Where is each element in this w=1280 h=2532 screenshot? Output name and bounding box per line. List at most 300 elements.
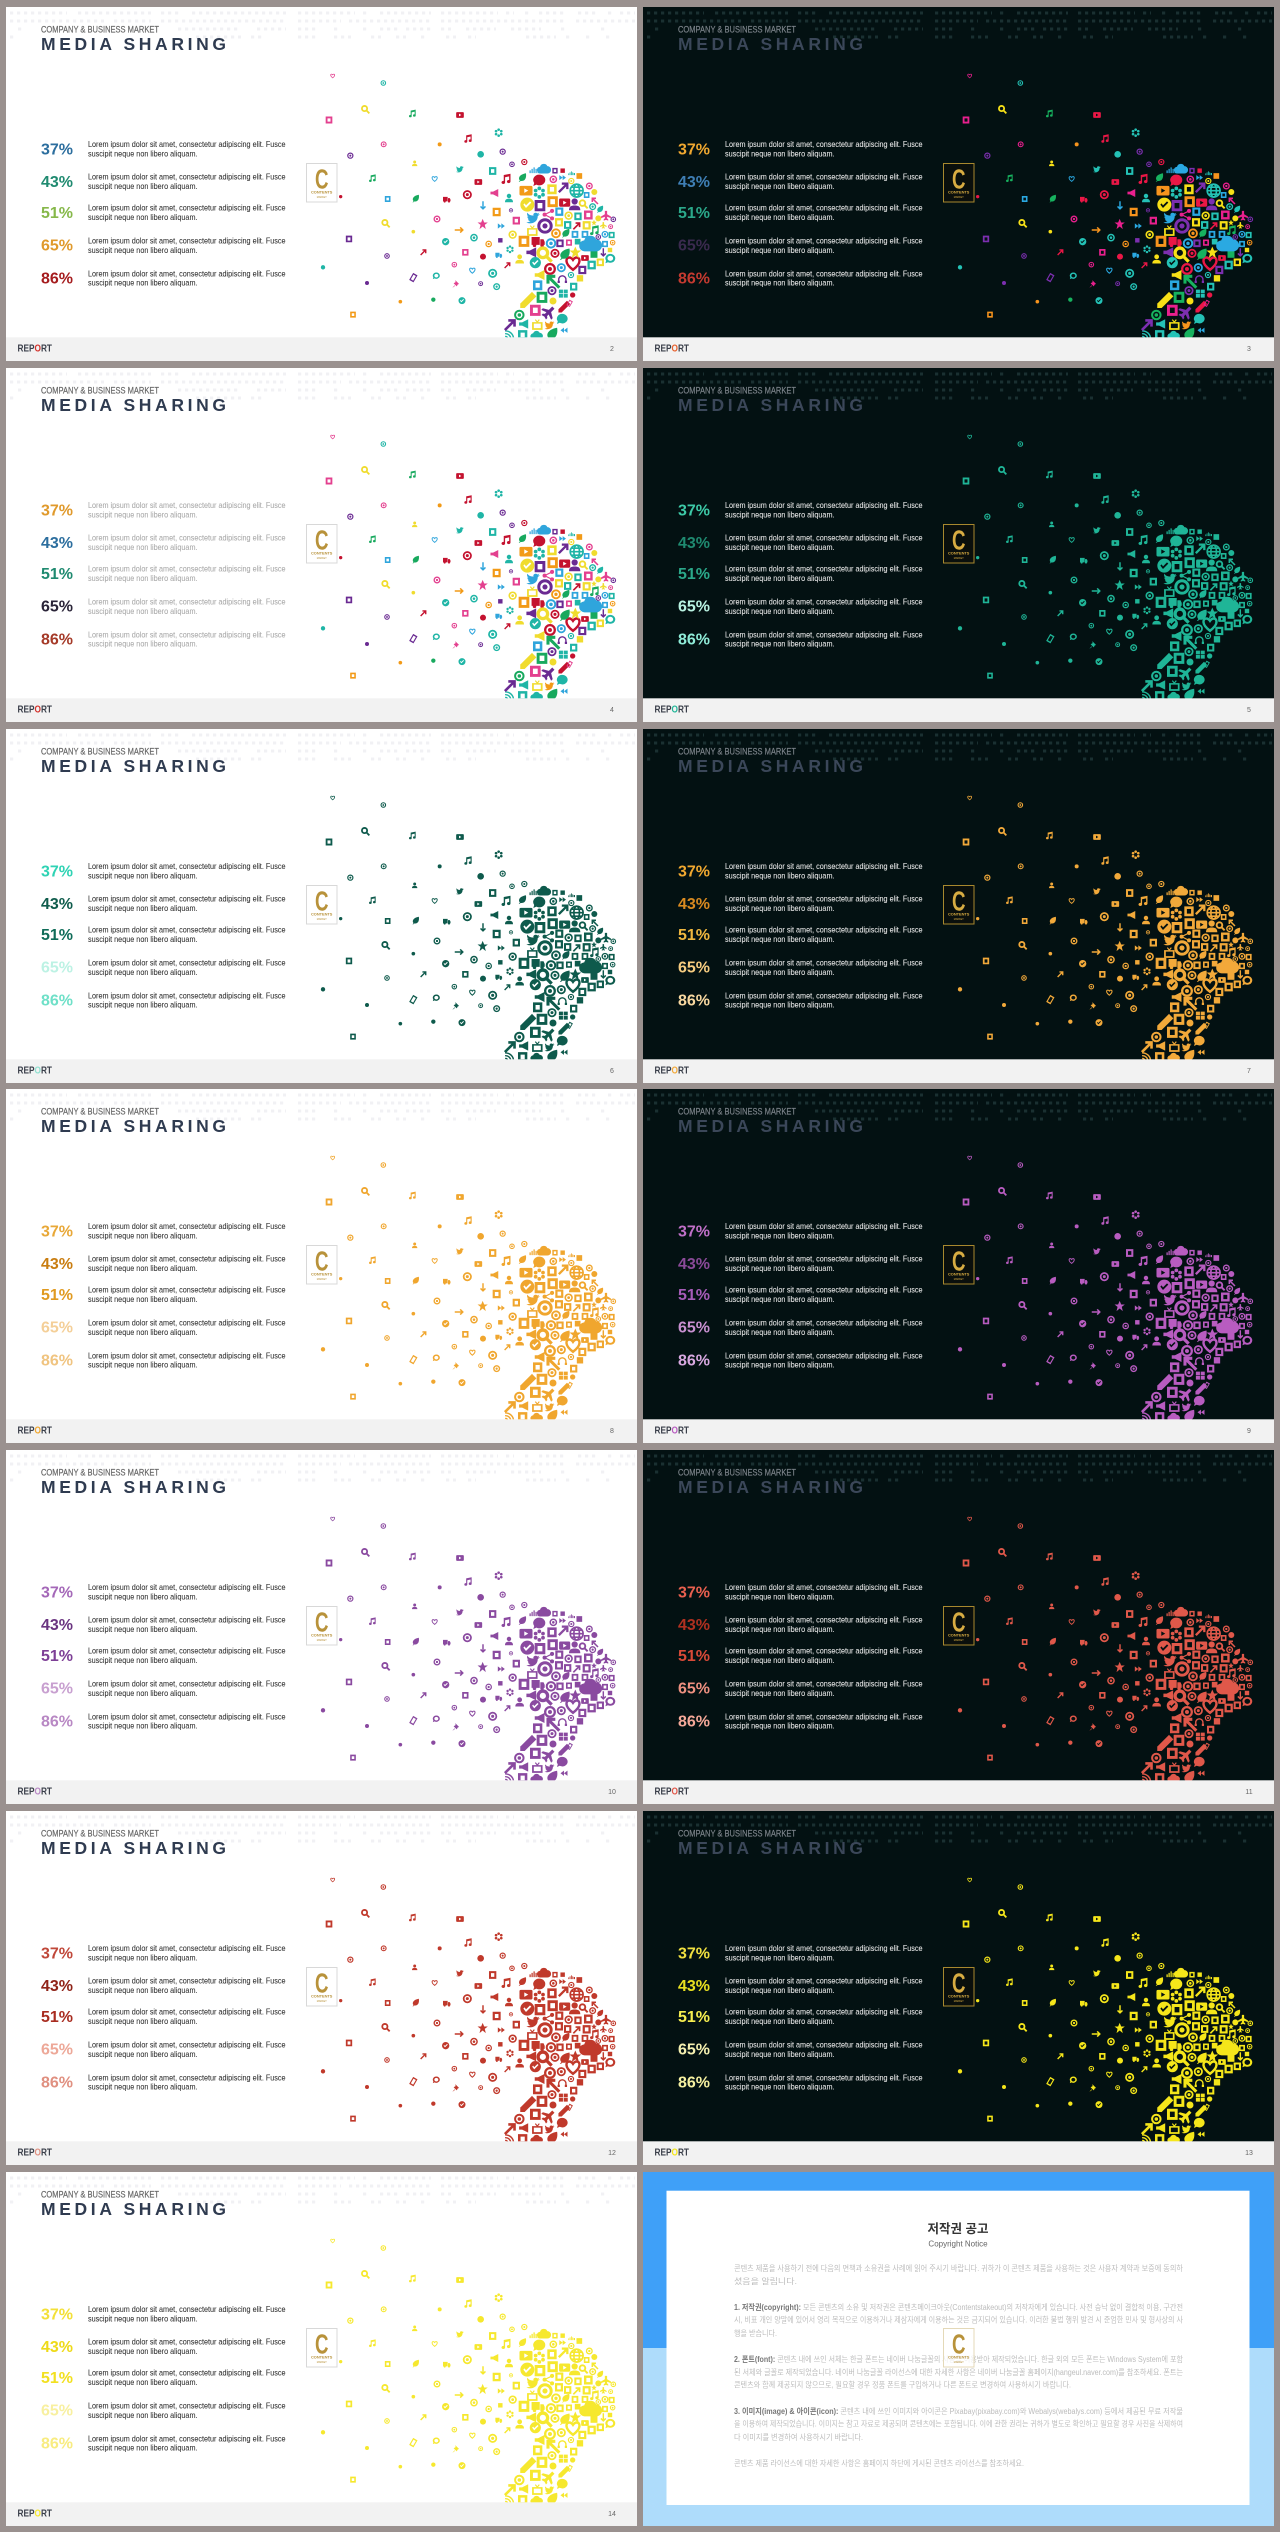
- footer: REPORT: [654, 1785, 689, 1797]
- stat 65%: suscipit neque non libero aliquam.: [88, 968, 198, 977]
- stat 51%: suscipit neque non libero aliquam.: [725, 2017, 834, 2026]
- stat 65%: [678, 958, 923, 977]
- logo badge: [306, 164, 337, 202]
- stat 37%: suscipit neque non libero aliquam.: [725, 871, 834, 880]
- stat 65%: Lorem ipsum dolor sit amet, consectetur adipiscing elit. Fusce: [725, 958, 923, 967]
- panel: slide 3: [643, 7, 1274, 361]
- stat 43%: Lorem ipsum dolor sit amet, consectetur adipiscing elit. Fusce: [725, 533, 923, 542]
- logo badge: CONTENTS: [948, 1994, 970, 1998]
- panel: slide 9: [643, 1089, 1274, 1443]
- heading: COMPANY & BUSINESS MARKET: [41, 1107, 159, 1118]
- stat 86%: [678, 1352, 923, 1370]
- logo badge: [944, 1246, 974, 1284]
- stat 86%: Lorem ipsum dolor sit amet, consectetur adipiscing elit. Fusce: [88, 1352, 286, 1361]
- stat 43%: 43%: [678, 1978, 710, 1995]
- stat 43%: Lorem ipsum dolor sit amet, consectetur adipiscing elit. Fusce: [88, 1616, 286, 1625]
- stat 86%: Lorem ipsum dolor sit amet, consectetur adipiscing elit. Fusce: [88, 630, 286, 639]
- footer: [6, 1059, 637, 1083]
- footer: [643, 1780, 1274, 1804]
- stat 51%: [678, 564, 923, 583]
- stat 43%: [678, 894, 923, 913]
- stat 86%: suscipit neque non libero aliquam.: [725, 2083, 834, 2092]
- stat 65%: suscipit neque non libero aliquam.: [88, 2411, 198, 2420]
- logo badge: C: [952, 1246, 965, 1277]
- stat 65%: Lorem ipsum dolor sit amet, consectetur adipiscing elit. Fusce: [88, 1319, 286, 1328]
- stat 43%: [41, 1977, 286, 1995]
- stat 37%: suscipit neque non libero aliquam.: [88, 1592, 198, 1601]
- stat 43%: 43%: [41, 174, 73, 191]
- heading: MEDIA SHARING: [41, 2199, 226, 2219]
- stat 43%: 43%: [41, 1256, 73, 1273]
- logo badge: [944, 885, 974, 924]
- notice: font: 된 서체와 글꼴로 제작되었습니다. 네이버 나눔글꼴 라이선스에 대한 자세한 사항은 네이버 나눔글꼴 홈페이지(hangeul.naver.com)를 참조하세요. 폰트는: [734, 2367, 1183, 2377]
- stat 37%: 37%: [678, 1946, 710, 1962]
- stat 37%: [41, 862, 286, 880]
- stat 43%: [678, 1616, 923, 1634]
- stat 43%: 43%: [678, 1256, 710, 1273]
- stat 37%: suscipit neque non libero aliquam.: [725, 1232, 834, 1241]
- footer: 7: [1247, 1068, 1251, 1075]
- stat 37%: 37%: [678, 1585, 710, 1602]
- stat 43%: suscipit neque non libero aliquam.: [88, 1625, 198, 1634]
- stat 51%: [41, 1286, 286, 1304]
- stat 65%: 65%: [678, 2042, 710, 2059]
- stat 37%: suscipit neque non libero aliquam.: [88, 1232, 198, 1241]
- stat 43%: suscipit neque non libero aliquam.: [725, 182, 834, 191]
- panel: slide 10: [6, 1450, 637, 1804]
- stat 43%: suscipit neque non libero aliquam.: [88, 1264, 198, 1273]
- logo badge: CONTENTS: [311, 1272, 333, 1277]
- logo badge: [306, 1607, 337, 1645]
- stat 65%: Lorem ipsum dolor sit amet, consectetur adipiscing elit. Fusce: [725, 2041, 923, 2050]
- stat 51%: Lorem ipsum dolor sit amet, consectetur adipiscing elit. Fusce: [725, 1647, 923, 1656]
- logo badge: CONTENTS: [948, 2354, 970, 2359]
- footer: [6, 2141, 637, 2165]
- stat 51%: 51%: [678, 2009, 710, 2026]
- stat 37%: [41, 1583, 286, 1602]
- logo badge: [944, 1968, 974, 2006]
- footer: [643, 2141, 1274, 2165]
- stat 37%: suscipit neque non libero aliquam.: [725, 510, 834, 519]
- stat 86%: 86%: [678, 270, 710, 287]
- logo badge: [944, 524, 974, 563]
- stat 51%: suscipit neque non libero aliquam.: [725, 574, 834, 583]
- stat 65%: [678, 1680, 923, 1698]
- stat 51%: Lorem ipsum dolor sit amet, consectetur adipiscing elit. Fusce: [88, 564, 286, 573]
- stat 65%: 65%: [41, 2402, 73, 2419]
- footer: 10: [608, 1789, 616, 1796]
- stat 65%: suscipit neque non libero aliquam.: [725, 246, 834, 255]
- logo badge: C: [952, 885, 965, 916]
- footer: REPORT: [18, 703, 52, 715]
- stat 86%: 86%: [41, 1353, 73, 1370]
- stat 86%: suscipit neque non libero aliquam.: [88, 2083, 198, 2092]
- stat 43%: suscipit neque non libero aliquam.: [725, 1986, 834, 1995]
- stat 37%: 37%: [678, 863, 710, 880]
- logo badge: MARKET: [317, 2000, 327, 2003]
- stat 65%: suscipit neque non libero aliquam.: [88, 2050, 198, 2059]
- panel: slide 4: [6, 368, 637, 722]
- stat 43%: suscipit neque non libero aliquam.: [725, 904, 834, 913]
- notice intro: 콘텐츠 제품을 사용하기 전에 다음의 면책과 소유권을 사례에 읽어 주시기 바랍니다. 귀하가 이 콘텐츠 제품을 사용하는 것은 사용자 계약과 보증에 동의하: [734, 2263, 1184, 2273]
- stat 86%: [41, 1352, 286, 1370]
- footer: [6, 1420, 637, 1444]
- logo badge: C: [315, 2328, 328, 2359]
- stat 51%: 51%: [678, 205, 710, 222]
- stat 51%: Lorem ipsum dolor sit amet, consectetur adipiscing elit. Fusce: [725, 1286, 923, 1295]
- logo badge: MARKET: [317, 2361, 327, 2364]
- icon cloud: head: [321, 796, 616, 1062]
- footer: REPORT: [18, 1425, 52, 1437]
- icon cloud: head: [958, 435, 1253, 701]
- stat 43%: Lorem ipsum dolor sit amet, consectetur adipiscing elit. Fusce: [88, 1255, 286, 1264]
- heading: [41, 1107, 226, 1136]
- notice: image and icon: 3. 이미지(image) & 아이콘(icon): 콘텐츠 내에 쓰인 이미지와 아이콘은 Pixabay(pixabay.com)와 Webalys(webalys.com) 등에서 제공된 무료 저작물: [734, 2406, 1183, 2416]
- panel: slide 5: [643, 368, 1274, 722]
- stat 65%: 65%: [41, 959, 73, 976]
- stat 43%: Lorem ipsum dolor sit amet, consectetur adipiscing elit. Fusce: [725, 894, 923, 903]
- stat 51%: 51%: [678, 927, 710, 944]
- stat 43%: 43%: [678, 174, 710, 191]
- logo badge: MARKET: [954, 1639, 964, 1642]
- logo badge: [306, 885, 337, 924]
- heading: [41, 24, 226, 54]
- logo badge: MARKET: [954, 196, 964, 199]
- logo badge: C: [315, 1968, 328, 1998]
- stat 51%: suscipit neque non libero aliquam.: [88, 2017, 198, 2026]
- stat 86%: [41, 630, 286, 648]
- stat 86%: suscipit neque non libero aliquam.: [725, 1722, 834, 1731]
- stat 86%: [678, 991, 923, 1009]
- notice: image and icon: 다 이미지를 변경하여 사용하시기 바랍니다.: [734, 2432, 863, 2442]
- stat 65%: 65%: [41, 598, 73, 615]
- stat 86%: suscipit neque non libero aliquam.: [725, 1361, 834, 1370]
- stat 37%: suscipit neque non libero aliquam.: [88, 2314, 198, 2323]
- stat 65%: Lorem ipsum dolor sit amet, consectetur adipiscing elit. Fusce: [88, 2041, 286, 2050]
- footer: REPORT: [18, 2146, 52, 2158]
- stat 51%: Lorem ipsum dolor sit amet, consectetur adipiscing elit. Fusce: [88, 204, 286, 213]
- stat 37%: [678, 1944, 923, 1962]
- heading: [41, 385, 226, 415]
- stat 51%: suscipit neque non libero aliquam.: [725, 213, 834, 222]
- stat 65%: [678, 237, 923, 255]
- stat 86%: [678, 2073, 923, 2092]
- stat 43%: 43%: [41, 896, 73, 913]
- heading: COMPANY & BUSINESS MARKET: [41, 1467, 159, 1478]
- stat 51%: suscipit neque non libero aliquam.: [88, 1656, 198, 1665]
- stat 37%: Lorem ipsum dolor sit amet, consectetur adipiscing elit. Fusce: [725, 862, 923, 871]
- stat 86%: Lorem ipsum dolor sit amet, consectetur adipiscing elit. Fusce: [88, 2073, 286, 2082]
- stat 43%: Lorem ipsum dolor sit amet, consectetur adipiscing elit. Fusce: [88, 1977, 286, 1986]
- stat 65%: Lorem ipsum dolor sit amet, consectetur adipiscing elit. Fusce: [725, 597, 923, 606]
- heading: COMPANY & BUSINESS MARKET: [41, 24, 159, 35]
- stat 65%: 65%: [41, 1681, 73, 1698]
- panel: slide 8: [6, 1089, 637, 1443]
- stat 51%: [41, 1647, 286, 1665]
- heading: MEDIA SHARING: [678, 1838, 863, 1858]
- footer: 8: [610, 1428, 614, 1435]
- stat 65%: suscipit neque non libero aliquam.: [725, 1328, 834, 1337]
- icon cloud: head: [321, 74, 616, 340]
- icon cloud: head: [958, 1157, 1253, 1422]
- heading: [41, 746, 226, 776]
- footer: [6, 2502, 637, 2526]
- stat 65%: suscipit neque non libero aliquam.: [88, 246, 198, 255]
- stat 51%: Lorem ipsum dolor sit amet, consectetur adipiscing elit. Fusce: [88, 1286, 286, 1295]
- stat 65%: 65%: [678, 238, 710, 255]
- logo badge: C: [952, 1968, 965, 1998]
- stat 65%: 65%: [678, 1681, 710, 1698]
- footer: 4: [610, 707, 614, 714]
- stat 86%: 86%: [678, 1713, 710, 1730]
- stat 51%: Lorem ipsum dolor sit amet, consectetur adipiscing elit. Fusce: [88, 2368, 286, 2377]
- stat 65%: 65%: [41, 1320, 73, 1337]
- footer: [643, 1420, 1274, 1444]
- stat 51%: 51%: [678, 1648, 710, 1665]
- stat 86%: suscipit neque non libero aliquam.: [88, 639, 198, 648]
- stat 43%: Lorem ipsum dolor sit amet, consectetur adipiscing elit. Fusce: [88, 2337, 286, 2346]
- stat 37%: 37%: [41, 863, 73, 880]
- stat 86%: [41, 1712, 286, 1731]
- stat 43%: Lorem ipsum dolor sit amet, consectetur adipiscing elit. Fusce: [725, 1616, 923, 1625]
- icon cloud: head: [321, 2239, 616, 2505]
- stat 51%: suscipit neque non libero aliquam.: [725, 1295, 834, 1304]
- icon cloud: head: [321, 435, 616, 701]
- footer: 6: [610, 1068, 614, 1075]
- footer: REPORT: [654, 1425, 689, 1437]
- stat 65%: suscipit neque non libero aliquam.: [88, 1689, 198, 1698]
- heading: [41, 1828, 226, 1858]
- stat 86%: suscipit neque non libero aliquam.: [725, 639, 834, 648]
- stat 51%: Lorem ipsum dolor sit amet, consectetur adipiscing elit. Fusce: [725, 925, 923, 934]
- stat 37%: [41, 1944, 286, 1962]
- logo badge: CONTENTS: [311, 2354, 333, 2359]
- stat 86%: suscipit neque non libero aliquam.: [88, 279, 198, 288]
- stat 37%: suscipit neque non libero aliquam.: [88, 1953, 198, 1962]
- logo badge: MARKET: [954, 2000, 964, 2003]
- stat 65%: Lorem ipsum dolor sit amet, consectetur adipiscing elit. Fusce: [88, 958, 286, 967]
- stat 43%: 43%: [678, 896, 710, 913]
- stat 43%: [678, 1977, 923, 1995]
- stat 51%: [678, 1647, 923, 1665]
- notice: copyright: [734, 2302, 1184, 2338]
- stat 86%: 86%: [678, 631, 710, 648]
- logo badge: C: [315, 164, 328, 194]
- heading: COMPANY & BUSINESS MARKET: [678, 1107, 796, 1118]
- logo badge: [944, 164, 974, 202]
- stat 51%: [41, 204, 286, 222]
- stat 65%: Lorem ipsum dolor sit amet, consectetur adipiscing elit. Fusce: [725, 1319, 923, 1328]
- logo badge: [306, 1968, 337, 2006]
- footer: 11: [1245, 1789, 1253, 1796]
- stat 65%: suscipit neque non libero aliquam.: [88, 607, 198, 616]
- panel: slide 12: [6, 1811, 637, 2165]
- stat 37%: Lorem ipsum dolor sit amet, consectetur adipiscing elit. Fusce: [88, 1583, 286, 1592]
- stat 43%: Lorem ipsum dolor sit amet, consectetur adipiscing elit. Fusce: [725, 1255, 923, 1264]
- heading: MEDIA SHARING: [41, 1116, 226, 1136]
- stat 65%: suscipit neque non libero aliquam.: [725, 1689, 834, 1698]
- logo badge: [306, 1246, 337, 1284]
- stat 51%: suscipit neque non libero aliquam.: [88, 574, 198, 583]
- stat 51%: [678, 204, 923, 222]
- stat 37%: Lorem ipsum dolor sit amet, consectetur adipiscing elit. Fusce: [725, 1222, 923, 1231]
- heading: [678, 24, 863, 54]
- stat 51%: 51%: [41, 1648, 73, 1665]
- stat 51%: suscipit neque non libero aliquam.: [88, 213, 198, 222]
- footer: REPORT: [654, 1064, 689, 1076]
- stat 51%: suscipit neque non libero aliquam.: [88, 1295, 198, 1304]
- stat 43%: 43%: [41, 1978, 73, 1995]
- stat 86%: 86%: [41, 2435, 73, 2452]
- heading: MEDIA SHARING: [678, 395, 863, 415]
- logo badge: CONTENTS: [311, 911, 333, 916]
- footer: [6, 698, 637, 722]
- stat 43%: Lorem ipsum dolor sit amet, consectetur adipiscing elit. Fusce: [725, 1977, 923, 1986]
- icon cloud: head: [958, 1517, 1253, 1783]
- stat 43%: [678, 1255, 923, 1273]
- stat 86%: [678, 269, 923, 288]
- heading: COMPANY & BUSINESS MARKET: [678, 1467, 796, 1478]
- notice title: 저작권 공고: [928, 2221, 988, 2236]
- stat 43%: [41, 1255, 286, 1273]
- stat 43%: [41, 2337, 286, 2356]
- heading: [678, 1107, 863, 1136]
- heading: [678, 1828, 863, 1858]
- heading: COMPANY & BUSINESS MARKET: [41, 2189, 159, 2200]
- stat 86%: suscipit neque non libero aliquam.: [88, 1000, 198, 1009]
- icon cloud: head: [321, 1517, 616, 1783]
- stat 37%: Lorem ipsum dolor sit amet, consectetur adipiscing elit. Fusce: [725, 1583, 923, 1592]
- stat 51%: 51%: [678, 566, 710, 583]
- footer: REPORT: [18, 1064, 52, 1076]
- stat 43%: suscipit neque non libero aliquam.: [725, 1264, 834, 1273]
- logo badge: [944, 2328, 974, 2367]
- heading: COMPANY & BUSINESS MARKET: [678, 746, 796, 757]
- stat 43%: Lorem ipsum dolor sit amet, consectetur adipiscing elit. Fusce: [88, 894, 286, 903]
- stat 86%: Lorem ipsum dolor sit amet, consectetur adipiscing elit. Fusce: [725, 2073, 923, 2082]
- heading: MEDIA SHARING: [678, 756, 863, 776]
- stat 86%: 86%: [41, 270, 73, 287]
- stat 65%: [41, 2401, 286, 2420]
- stat 86%: 86%: [678, 1353, 710, 1370]
- icon cloud: head: [958, 796, 1253, 1062]
- footer: REPORT: [18, 1785, 52, 1797]
- stat 37%: suscipit neque non libero aliquam.: [88, 149, 198, 158]
- logo badge: MARKET: [317, 196, 327, 199]
- stat 51%: [41, 2008, 286, 2026]
- stat 51%: Lorem ipsum dolor sit amet, consectetur adipiscing elit. Fusce: [88, 2008, 286, 2017]
- notice: font: 콘텐츠와 함께 제공되지 않으므로, 필요할 경우 정품 폰트를 구입하거나 다른 폰트로 변경하여 사용하시기 바랍니다.: [734, 2379, 1071, 2389]
- icon cloud: head: [958, 1878, 1253, 2144]
- notice: font: 2. 폰트(font): 콘텐츠 내에 쓰인 서체는 한글 폰트는 네이버 나눔글꼴의 사용을 허용받아 제작되었습니다. 한글 외의 모든 폰트는 Windows System에 포함: [734, 2354, 1184, 2364]
- notice title: Copyright Notice: [928, 2239, 988, 2248]
- notice intro: 셨음을 알립니다.: [734, 2276, 797, 2286]
- stat 65%: [41, 958, 286, 977]
- stat 37%: [678, 862, 923, 880]
- stat 37%: [678, 1222, 923, 1241]
- notice: image and icon: 을 이용하여 제작되었습니다. 이미지는 참고 자료로 제공되며 콘텐츠에는 포함됩니다. 이에 관한 권리는 귀하가 별도로 확인하고 필요할 경우 사진을 삭제하여: [734, 2418, 1183, 2428]
- stat 37%: suscipit neque non libero aliquam.: [725, 1953, 834, 1962]
- stat 43%: Lorem ipsum dolor sit amet, consectetur adipiscing elit. Fusce: [88, 173, 286, 182]
- stat 43%: 43%: [678, 1617, 710, 1634]
- notice: license note: 콘텐츠 제품 라이선스에 대한 자세한 사항은 홈페이지 하단에 게시된 콘텐츠 라이선스를 참조하세요.: [734, 2458, 1024, 2468]
- stat 86%: Lorem ipsum dolor sit amet, consectetur adipiscing elit. Fusce: [88, 1712, 286, 1721]
- stat 65%: suscipit neque non libero aliquam.: [88, 1328, 198, 1337]
- stat 86%: Lorem ipsum dolor sit amet, consectetur adipiscing elit. Fusce: [725, 269, 923, 278]
- stat 65%: 65%: [41, 2042, 73, 2059]
- notice: image and icon: [734, 2406, 1183, 2442]
- footer: [643, 337, 1274, 361]
- stat 43%: Lorem ipsum dolor sit amet, consectetur adipiscing elit. Fusce: [88, 533, 286, 542]
- heading: [41, 2189, 226, 2219]
- stat 43%: suscipit neque non libero aliquam.: [88, 182, 198, 191]
- stat 43%: [678, 533, 923, 552]
- heading: COMPANY & BUSINESS MARKET: [41, 1828, 159, 1839]
- stat 65%: Lorem ipsum dolor sit amet, consectetur adipiscing elit. Fusce: [88, 237, 286, 246]
- stat 43%: Lorem ipsum dolor sit amet, consectetur adipiscing elit. Fusce: [725, 173, 923, 182]
- stat 51%: 51%: [41, 2370, 73, 2387]
- stat 86%: 86%: [41, 2074, 73, 2091]
- stat 65%: [678, 2041, 923, 2059]
- panel: slide 7: [643, 729, 1274, 1083]
- stat 43%: suscipit neque non libero aliquam.: [88, 1986, 198, 1995]
- stat 37%: [678, 1583, 923, 1602]
- logo badge: CONTENTS: [311, 1994, 333, 1998]
- stat 37%: [41, 2305, 286, 2323]
- stat 86%: suscipit neque non libero aliquam.: [725, 1000, 834, 1009]
- stat 65%: [41, 597, 286, 616]
- stat 37%: [41, 140, 286, 158]
- stat 65%: 65%: [678, 1320, 710, 1337]
- stat 37%: Lorem ipsum dolor sit amet, consectetur adipiscing elit. Fusce: [88, 1222, 286, 1231]
- footer: [6, 1780, 637, 1804]
- heading: [678, 1467, 863, 1497]
- stat 86%: [41, 2073, 286, 2092]
- footer: 5: [1247, 707, 1251, 714]
- stat 86%: [41, 991, 286, 1009]
- logo badge: CONTENTS: [311, 190, 333, 194]
- stat 37%: Lorem ipsum dolor sit amet, consectetur adipiscing elit. Fusce: [88, 862, 286, 871]
- footer: 3: [1247, 346, 1251, 353]
- stat 65%: [678, 597, 923, 616]
- logo badge: C: [952, 524, 965, 555]
- stat 37%: suscipit neque non libero aliquam.: [88, 510, 198, 519]
- panel: slide 11: [643, 1450, 1274, 1804]
- logo badge: MARKET: [954, 918, 964, 921]
- stat 51%: [678, 925, 923, 944]
- stat 43%: [41, 533, 286, 552]
- notice: copyright: 1. 저작권(copyright): 모든 콘텐츠의 소유 및 저작권은 콘텐츠메이크아웃(Contentstakeout)의 저작자에게 있습니다. 사전 승낙 없이 결합적 이용, 구간전: [734, 2302, 1183, 2312]
- stat 37%: Lorem ipsum dolor sit amet, consectetur adipiscing elit. Fusce: [88, 501, 286, 510]
- icon cloud: head: [958, 74, 1253, 340]
- logo badge: CONTENTS: [948, 550, 970, 555]
- stat 86%: 86%: [678, 2074, 710, 2091]
- logo badge: C: [952, 1607, 965, 1638]
- stat 37%: 37%: [41, 142, 73, 158]
- stat 37%: 37%: [41, 1946, 73, 1962]
- stat 51%: [41, 564, 286, 583]
- stat 51%: 51%: [41, 927, 73, 944]
- stat 37%: 37%: [41, 1585, 73, 1602]
- stat 51%: 51%: [678, 1287, 710, 1304]
- stat 51%: [678, 2008, 923, 2026]
- logo badge: MARKET: [954, 557, 964, 560]
- stat 37%: 37%: [678, 1224, 710, 1241]
- footer: REPORT: [18, 342, 52, 354]
- stat 86%: suscipit neque non libero aliquam.: [725, 279, 834, 288]
- stat 86%: 86%: [41, 992, 73, 1009]
- notice: copyright: 시, 비표 개인 양말에 있어서 영리 목적으로 이용하거나 제삼자에게 이용하는 것은 금지되어 있습니다. 이러한 불법 행위 발견 시 준엄한 민사 및 형사상의 사: [734, 2314, 1184, 2324]
